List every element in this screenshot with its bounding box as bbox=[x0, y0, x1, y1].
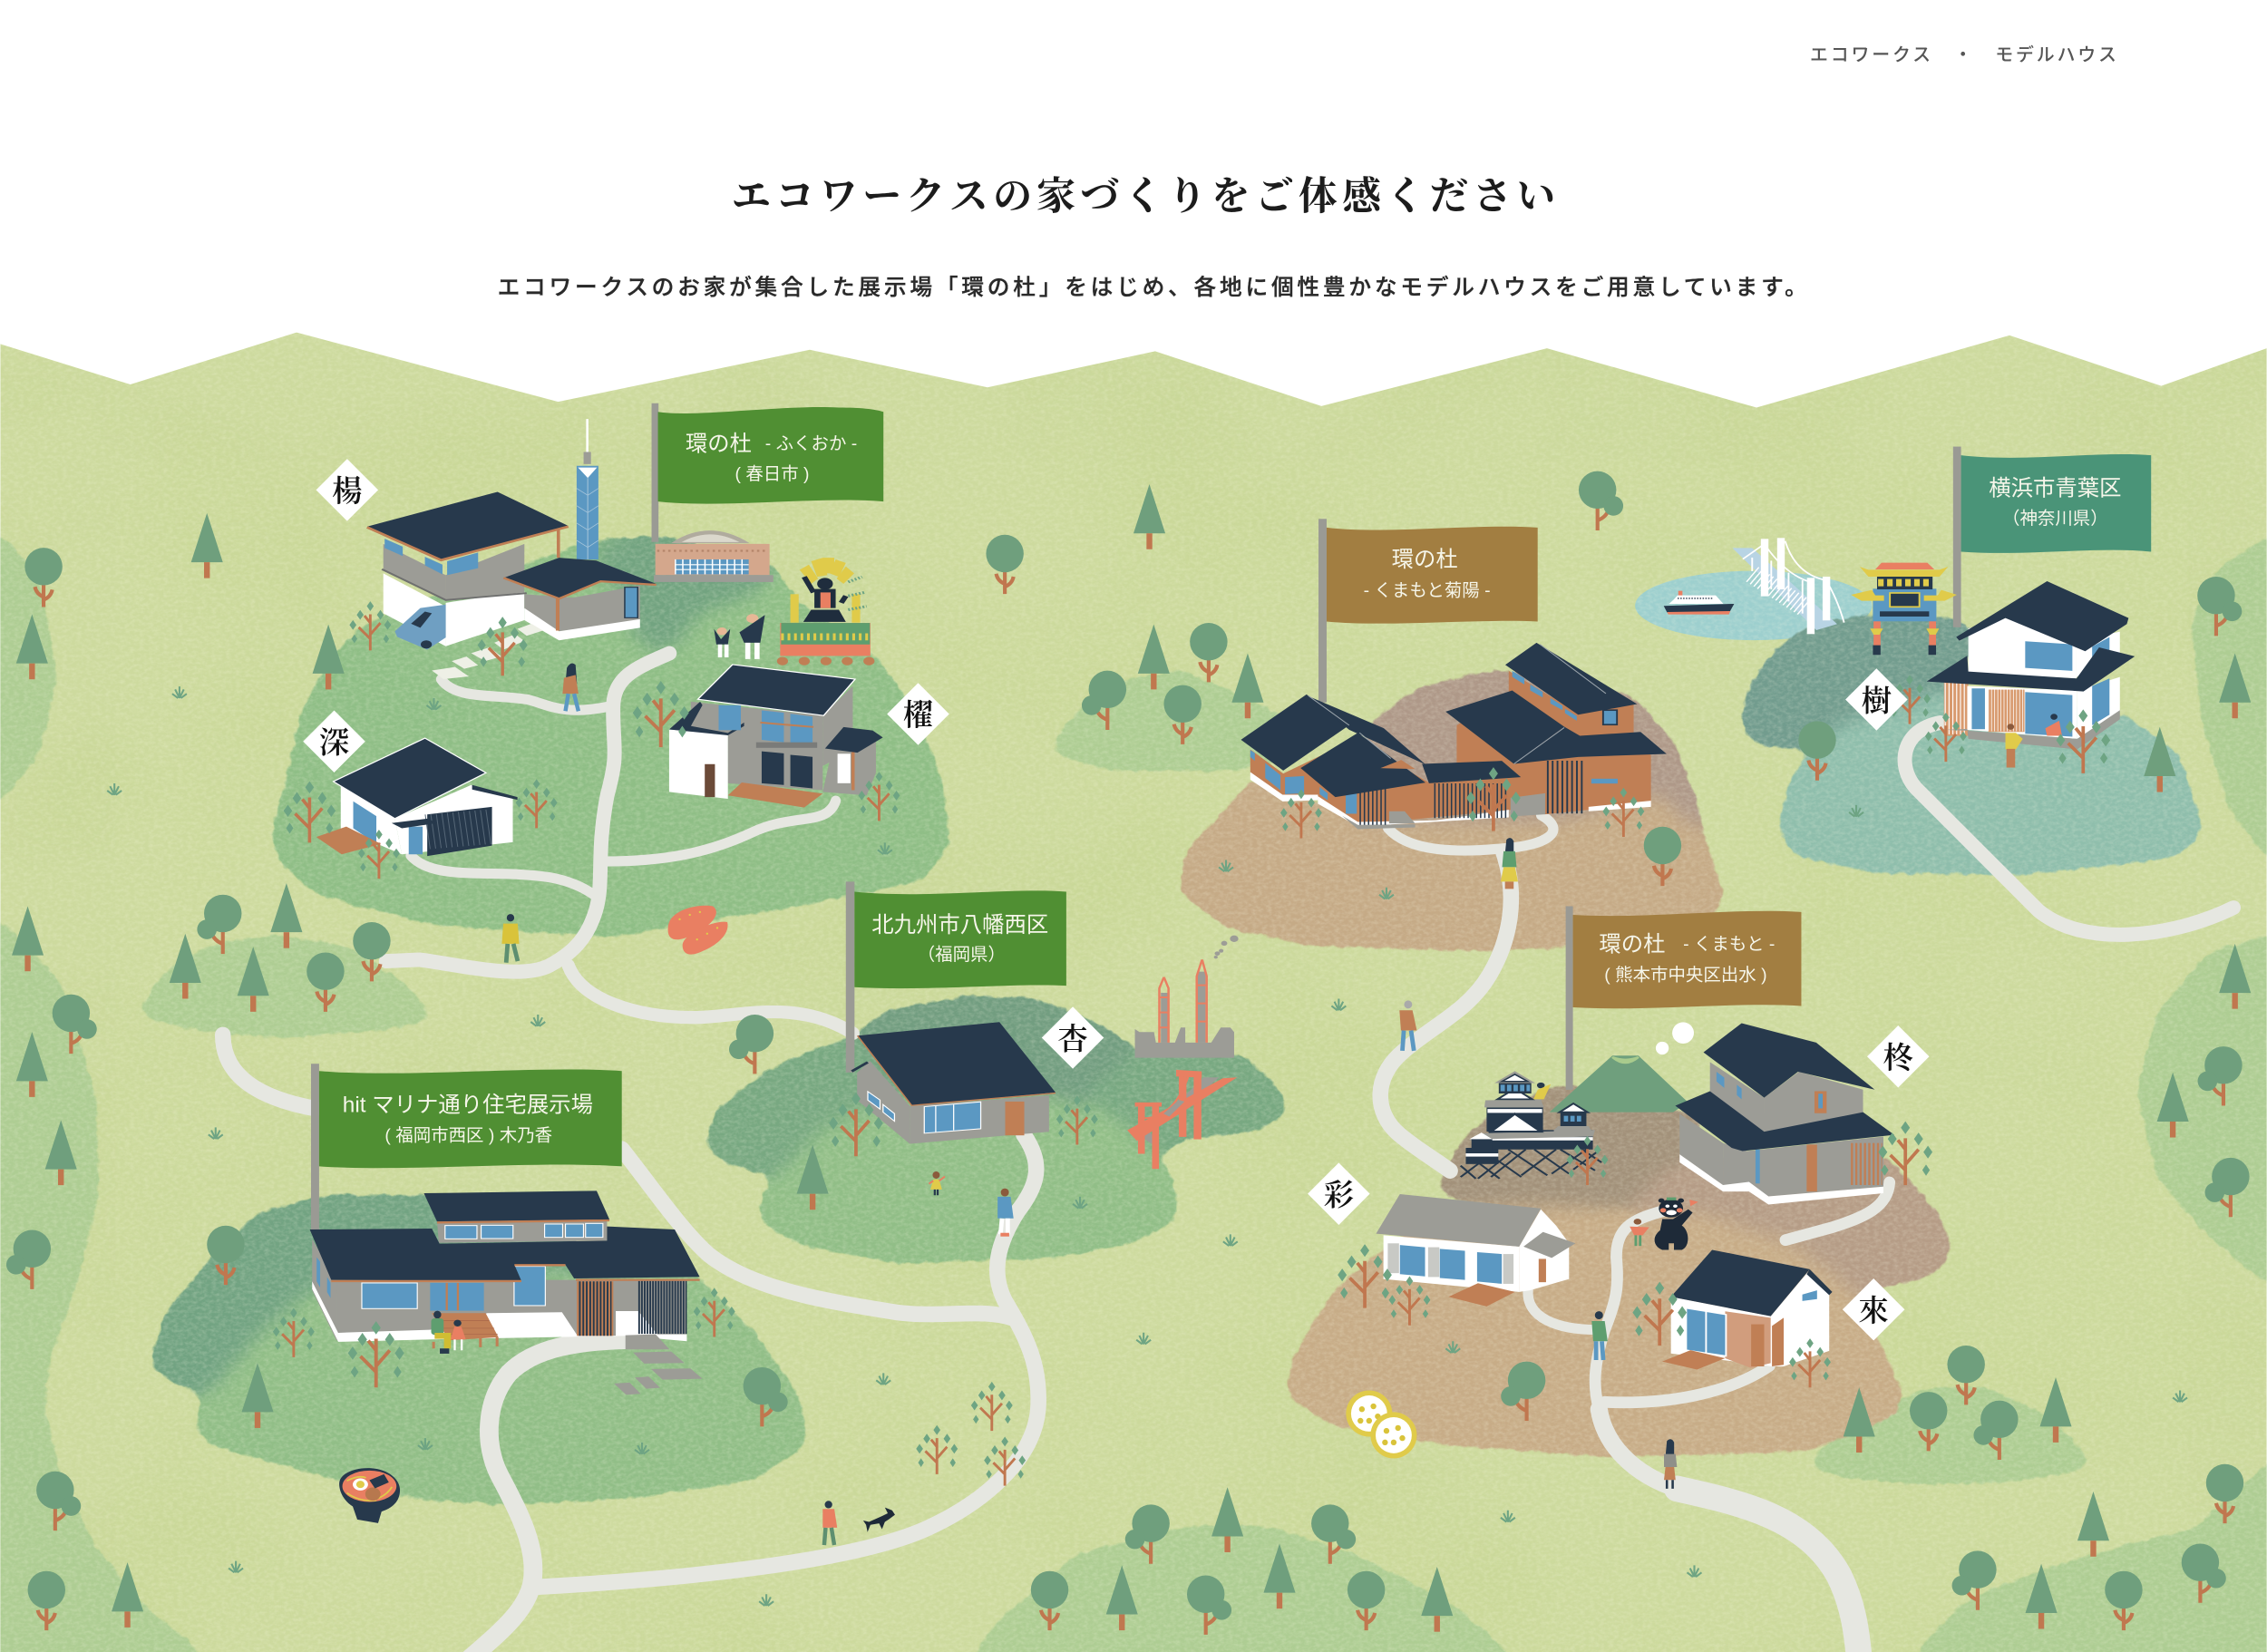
flag: 環の杜 ふくおか: ( 春日市 ) bbox=[735, 464, 810, 484]
sea bbox=[1635, 571, 1873, 640]
house: 楊 bbox=[367, 491, 657, 679]
house: 杏 bbox=[851, 1022, 1056, 1144]
hill: マリナ通り bbox=[152, 1198, 804, 1501]
landmark: Mount Aso bbox=[1550, 1055, 1688, 1113]
diamond: 彩: 彩 bbox=[1324, 1179, 1354, 1212]
man, blue top bbox=[997, 1189, 1014, 1237]
hill: 熊本 出水 bbox=[1289, 1088, 1951, 1454]
flag: 環の杜 くまもと 出水: - くまもと - bbox=[1683, 934, 1775, 954]
flag poles bbox=[311, 403, 1961, 1231]
diamond: 柊 bbox=[1867, 1025, 1930, 1088]
deck bbox=[432, 1313, 499, 1348]
flag: 環の杜 ふくおか: 環の杜 bbox=[686, 432, 752, 456]
flag: 環の杜 くまもと 出水: ( 熊本市中央区出水 ) bbox=[1604, 966, 1767, 986]
people walking bbox=[501, 663, 1677, 1545]
flag: 横浜市青葉区: 横浜市青葉区 bbox=[1989, 477, 2121, 501]
icon: mentaiko bbox=[668, 906, 728, 955]
hill: くまもと菊陽 bbox=[1182, 674, 1720, 948]
icon: ramen bowl bbox=[339, 1468, 400, 1523]
landmark: Kumamoto Castle bbox=[1461, 1071, 1601, 1179]
diamond: 杏 bbox=[1042, 1006, 1104, 1069]
landmark: Yokohama Bay Bridge bbox=[1732, 538, 1844, 634]
flag: 横浜市青葉区: （神奈川県） bbox=[2002, 509, 2108, 529]
flag: 北九州市八幡西区: 北九州市八幡西区 bbox=[871, 913, 1048, 938]
flag: 環の杜 くまもと 出水 bbox=[1573, 911, 1801, 1008]
label diamonds bbox=[303, 459, 1930, 1340]
character: Kumamon bbox=[1655, 1198, 1698, 1249]
diamond: 樹: 樹 bbox=[1862, 685, 1892, 718]
trees bbox=[6, 471, 2251, 1635]
house group: 熊本 出水 bbox=[1376, 1022, 1894, 1370]
side hills bbox=[0, 520, 2267, 1652]
girl bbox=[929, 1171, 945, 1195]
festival float bbox=[777, 558, 874, 666]
child with Kumamon bbox=[1630, 1219, 1649, 1246]
woman, 楊 path bbox=[562, 663, 579, 711]
flag: 環の杜 くまもと 出水: 環の杜 bbox=[1599, 933, 1666, 957]
flag: 北九州市八幡西区 bbox=[854, 890, 1066, 988]
man, green top bbox=[1591, 1311, 1608, 1360]
diamond: 來: 來 bbox=[1858, 1295, 1889, 1328]
header navigation: エコワークス ・ モデルハウス bbox=[1810, 44, 2116, 65]
people: sitting family bbox=[431, 1311, 466, 1354]
diamond: 櫂: 櫂 bbox=[903, 699, 933, 733]
festival people bbox=[714, 614, 765, 659]
flag: 環の杜 ふくおか bbox=[658, 407, 883, 504]
woman, orange skirt bbox=[1664, 1439, 1677, 1489]
flag: hit マリナ通り住宅展示場: ( 福岡市西区 ) 木乃香 bbox=[384, 1126, 552, 1146]
person waving at castle bbox=[1533, 1083, 1551, 1099]
flag: 環の杜 ふくおか: - ふくおか - bbox=[765, 434, 857, 454]
diamond: 來 bbox=[1843, 1278, 1904, 1340]
house: 櫂 bbox=[669, 665, 883, 808]
hill: 環の杜 ふくおか bbox=[275, 538, 947, 934]
house: 杏 group bbox=[851, 936, 1239, 1169]
diamond: 深 bbox=[303, 710, 365, 773]
landmark: Chinatown gate bbox=[1851, 563, 1957, 655]
roads bbox=[223, 654, 2233, 1652]
ship bbox=[1664, 591, 1734, 615]
man with dog bbox=[822, 1501, 837, 1545]
landmark: dome hall bbox=[654, 530, 774, 582]
diamond: 樹 bbox=[1845, 668, 1908, 731]
diamond: 深: 深 bbox=[319, 727, 349, 761]
flag: 北九州市八幡西区: （福岡県） bbox=[918, 945, 1006, 965]
icon: lotus root bbox=[1346, 1390, 1416, 1458]
flag: 環の杜 くまもと菊陽: - くまもと菊陽 - bbox=[1364, 581, 1491, 601]
hill: 横浜市青葉区 bbox=[1635, 571, 2200, 871]
house: 深 bbox=[316, 738, 518, 856]
diamond: 楊 bbox=[316, 459, 378, 521]
house: 環の杜 くまもと菊陽 bbox=[1241, 643, 1667, 829]
small light hills bbox=[139, 672, 2092, 1652]
flag: hit マリナ通り住宅展示場 bbox=[319, 1070, 622, 1168]
house: 横浜市青葉区 group bbox=[1664, 538, 2135, 768]
diamond: 柊: 柊 bbox=[1883, 1042, 1913, 1075]
house: 樹 bbox=[1927, 581, 2135, 750]
landmark: Fukuoka Tower bbox=[577, 419, 598, 559]
diamond: 櫂 bbox=[887, 683, 949, 745]
man, orange top bbox=[1399, 1000, 1416, 1051]
house group: ふくおか (楊) bbox=[316, 419, 883, 856]
flag: 環の杜 くまもと菊陽: 環の杜 bbox=[1392, 548, 1458, 572]
diamond: 杏: 杏 bbox=[1057, 1023, 1088, 1056]
flag: hit マリナ通り住宅展示場: hit マリナ通り住宅展示場 bbox=[343, 1093, 593, 1118]
grass tufts bbox=[107, 686, 2187, 1606]
dog bbox=[863, 1508, 895, 1532]
hill: 北九州 bbox=[707, 998, 1287, 1260]
flag: 横浜市青葉区 bbox=[1961, 454, 2151, 553]
landmark: Wakato Bridge bbox=[1127, 1070, 1237, 1169]
flag: 環の杜 くまもと菊陽 bbox=[1327, 527, 1538, 624]
saplings bbox=[273, 601, 2110, 1486]
house: マリナ通り group bbox=[310, 1190, 703, 1523]
house: 柊 bbox=[1675, 1023, 1894, 1204]
people: 樹 bbox=[2006, 714, 2062, 768]
house: 彩 bbox=[1376, 1194, 1575, 1307]
diamond: 彩 bbox=[1308, 1162, 1370, 1225]
diamond: 楊: 楊 bbox=[332, 475, 363, 509]
stepping stones bbox=[614, 1335, 703, 1394]
man, yellow top bbox=[501, 914, 520, 963]
title: エコワークスの家づくりをご体感ください bbox=[732, 175, 1555, 219]
woman, green top bbox=[1501, 838, 1518, 889]
subtitle: エコワークスのお家が集合した展示場「環の杜」をはじめ、各地に個性豊かなモデルハウスをご用意しています。 bbox=[498, 274, 1807, 300]
landmark: steel works bbox=[1135, 936, 1239, 1058]
house: 來 bbox=[1662, 1249, 1833, 1370]
thought bubbles bbox=[1656, 1022, 1694, 1054]
